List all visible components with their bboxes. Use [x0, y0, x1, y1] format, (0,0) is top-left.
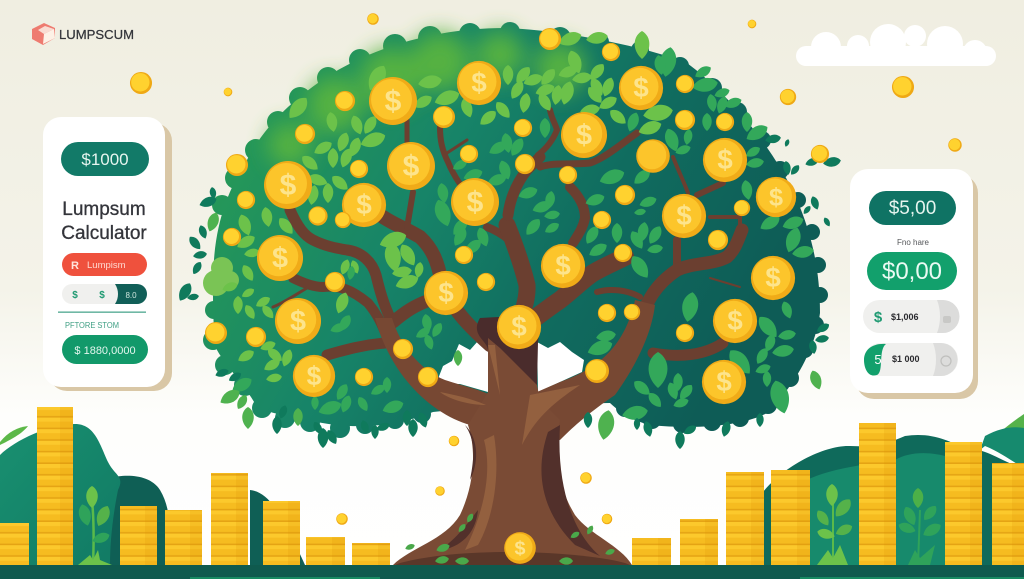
coins with dollar signs: $ [307, 361, 322, 391]
red pill [62, 253, 147, 276]
row one: $ [874, 309, 883, 326]
logo [32, 23, 134, 45]
coins with dollar signs: $ [717, 144, 733, 175]
falling coins [130, 13, 962, 525]
toggle pill [62, 284, 147, 304]
trunk shadows [443, 425, 600, 556]
coins with dollar signs: $ [467, 186, 484, 219]
canopy light rim [268, 31, 586, 167]
total pill [62, 335, 148, 364]
coin stacks left [0, 407, 390, 565]
coins with dollar signs: $ [280, 169, 297, 202]
row two: 5 [874, 352, 882, 367]
caption: PFTORE STOM [65, 320, 119, 330]
amount pill [869, 191, 956, 225]
amount pill: $5,00 [889, 198, 936, 219]
trunk highlights [440, 345, 580, 550]
amount pill [61, 142, 149, 176]
outer light leaves [205, 211, 824, 441]
row two [864, 343, 958, 376]
coins with dollar signs: $ [769, 183, 783, 211]
plant: left [77, 486, 113, 565]
small plain coins [205, 28, 750, 387]
coins with dollar signs: $ [471, 67, 487, 98]
edge leaves [175, 133, 842, 449]
coins with dollar signs: $ [576, 120, 592, 152]
canopy light bush [203, 257, 239, 296]
cloud [796, 24, 996, 66]
coins with dollar signs: $ [676, 200, 692, 231]
coins with dollar signs: $ [514, 538, 526, 560]
red pill: Lumpism [87, 260, 126, 271]
coins with dollar signs: $ [555, 250, 571, 281]
plant: right one [814, 484, 854, 565]
amount pill: $1000 [81, 150, 129, 169]
row one: $1,006 [891, 312, 919, 322]
branches [273, 110, 742, 355]
toggle pill: 8.0 [125, 291, 137, 300]
panel title: Calculator [61, 223, 147, 244]
coins with dollar signs: $ [385, 85, 402, 118]
tree trunk [375, 300, 655, 565]
toggle pill: $ [99, 290, 105, 301]
panel: right results [850, 169, 978, 399]
coins with dollar signs: $ [716, 366, 732, 397]
coins with dollar signs [257, 61, 796, 564]
ground [0, 565, 1024, 579]
coins with dollar signs: $ [290, 306, 306, 338]
row two: $1 000 [892, 354, 920, 364]
panel title [61, 199, 147, 244]
coins with dollar signs: $ [633, 72, 649, 103]
total pill: $ 1880,0000 [74, 345, 136, 357]
caption: Fno hare [897, 238, 930, 247]
right hills [763, 414, 1024, 565]
panel title: Lumpsum [62, 199, 146, 220]
plant: right two [897, 488, 943, 565]
icon: red cube [32, 23, 55, 45]
leaves on canopy [175, 29, 842, 449]
coin stacks right [632, 423, 1024, 565]
coins with dollar signs: $ [356, 189, 372, 220]
canopy gaps [436, 341, 584, 392]
tree canopy [203, 22, 828, 438]
light leaves [221, 29, 674, 384]
coins with dollar signs: $ [765, 262, 781, 293]
panel: left lumpsum calculator [43, 117, 172, 391]
coins with dollar signs: $ [511, 311, 527, 342]
left hills [0, 424, 305, 565]
root foliage [404, 512, 616, 565]
coins with dollar signs: $ [403, 150, 420, 183]
plants [77, 484, 943, 565]
logo wordmark: LUMPSCUM [59, 27, 134, 42]
divider [58, 312, 146, 313]
coins with dollar signs: $ [727, 305, 743, 336]
result pill [867, 252, 957, 290]
red pill: R [71, 260, 79, 272]
result pill: $0,00 [882, 258, 942, 285]
coins with dollar signs: $ [272, 243, 288, 275]
row one [863, 300, 960, 333]
coins with dollar signs: $ [438, 277, 454, 308]
toggle pill: $ [72, 290, 78, 301]
mid leaves [230, 46, 815, 422]
